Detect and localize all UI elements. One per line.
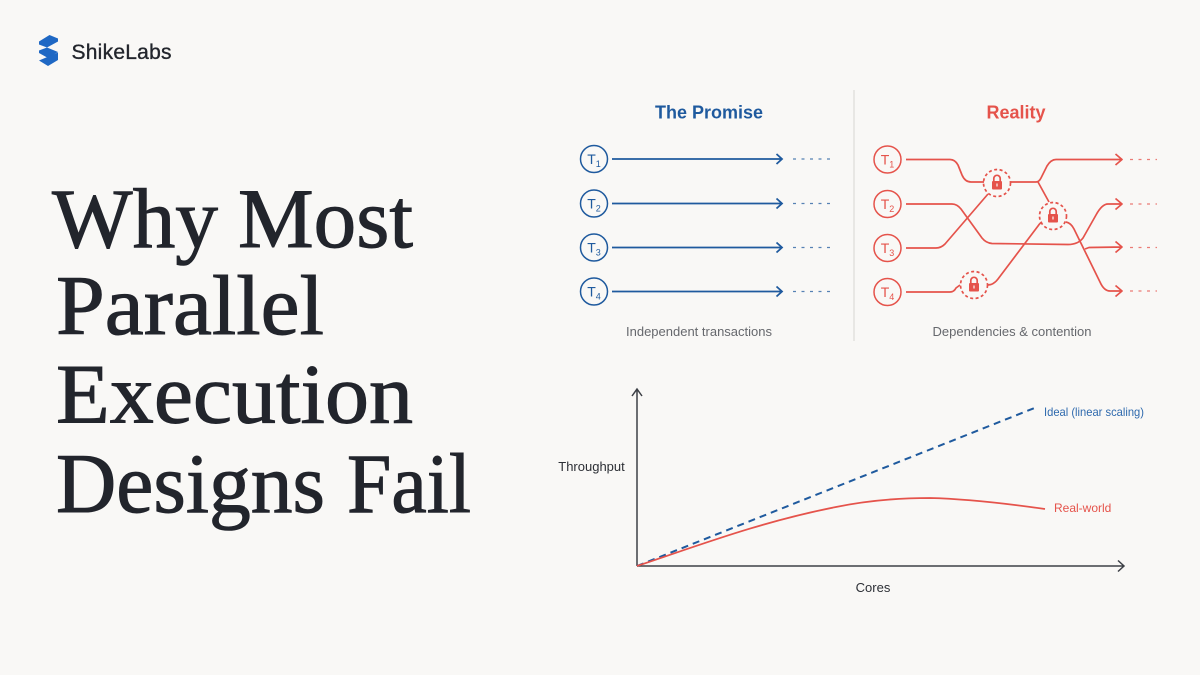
icon: lock 2 [1040, 202, 1066, 230]
panel: Reality [874, 102, 1157, 339]
heading: Reality: Reality [986, 102, 1046, 122]
transaction nodes: 3 [889, 248, 894, 258]
promise row T2: T [587, 196, 596, 212]
divider [853, 90, 855, 341]
transaction nodes [874, 146, 901, 306]
y axis label: Throughput [558, 459, 625, 474]
transaction nodes: T [881, 284, 889, 300]
heading: The Promise: The Promise [655, 102, 763, 122]
panel: The Promise [580, 102, 830, 339]
promise row T1: T [587, 151, 596, 167]
tangled transaction paths [906, 154, 1122, 296]
icon: lock 3 [960, 272, 988, 298]
title: Execution [56, 348, 413, 442]
real-world curve [637, 498, 1045, 566]
transaction nodes: T [881, 152, 889, 168]
promise row T3 [580, 234, 830, 261]
promise row T4 [580, 278, 830, 305]
logo: ShikeLabs [39, 35, 172, 66]
promise row T1: 1 [596, 159, 601, 169]
title [52, 172, 471, 531]
ideal line [637, 407, 1037, 566]
title: Designs [56, 437, 325, 531]
transaction nodes: 1 [889, 160, 894, 170]
promise row T3: T [587, 240, 596, 256]
title: Most [238, 172, 413, 266]
transaction nodes: T [881, 196, 889, 212]
icon: lock 1 [984, 170, 1010, 196]
x axis label: Cores [856, 580, 891, 595]
title: Parallel [56, 259, 324, 353]
promise row T4: 4 [596, 292, 601, 302]
caption: dependencies and contention: Dependencies & contention [932, 324, 1092, 339]
icon: logo mark [39, 35, 58, 66]
real-world label: Real-world [1054, 501, 1111, 515]
transaction nodes: T [881, 240, 889, 256]
caption: independent transactions: Independent transactions [626, 324, 772, 339]
logo wordmark: ShikeLabs [72, 41, 172, 64]
title: Why [52, 172, 218, 266]
axes [632, 389, 1124, 572]
promise row T1 [580, 146, 830, 172]
promise row T4: T [587, 284, 596, 300]
ideal label: Ideal (linear scaling) [1044, 405, 1144, 419]
chart: throughput vs cores [558, 389, 1144, 595]
promise row T2: 2 [596, 204, 601, 214]
title: Fail [347, 437, 471, 531]
promise row T3: 3 [596, 248, 601, 258]
transaction nodes: 2 [889, 204, 894, 214]
dashed continuations [1130, 160, 1157, 291]
transaction nodes: 4 [889, 292, 894, 302]
promise row T2 [580, 190, 830, 217]
